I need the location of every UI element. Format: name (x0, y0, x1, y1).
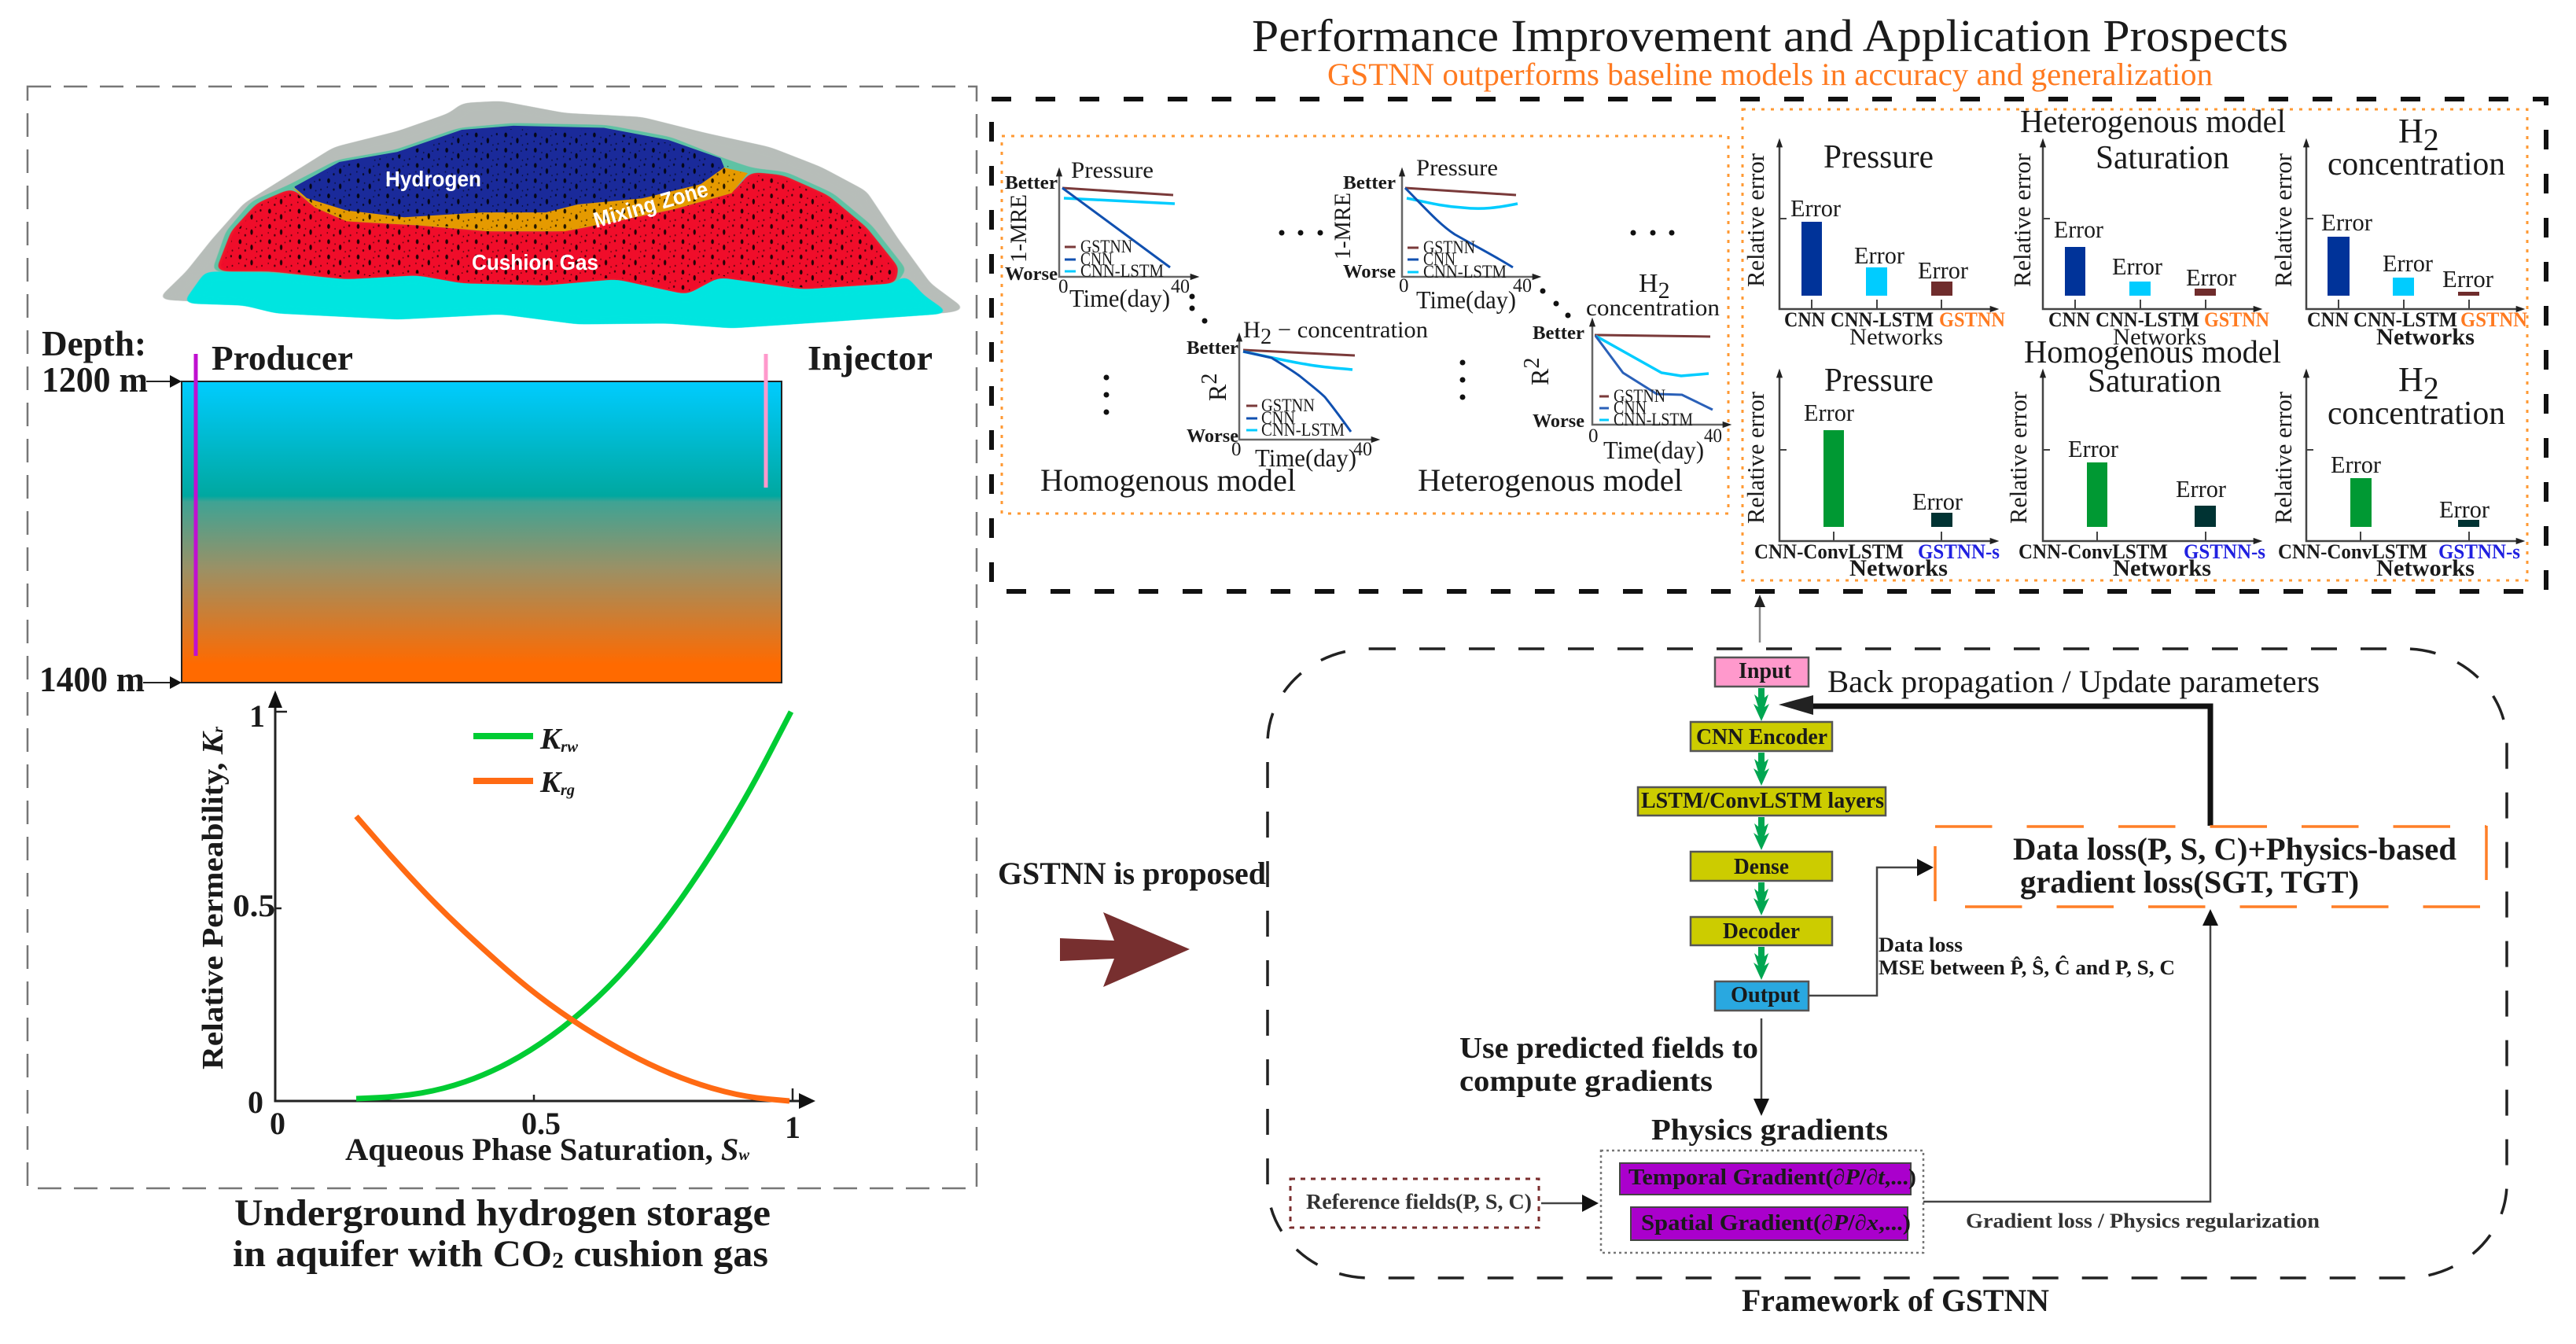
bar chart: heterogeneous H2 concentration: CNN-LSTM (2353, 308, 2457, 331)
caption: underground hydrogen storage: cushion gas (564, 1233, 768, 1275)
bar chart: heterogeneous pressure: Error (1918, 256, 1969, 284)
caption: underground hydrogen storage: Underground hydrogen storage (234, 1192, 771, 1234)
caption: underground hydrogen storage: 2 (552, 1249, 564, 1273)
panel: bar charts of relative error (1742, 103, 2527, 581)
line chart: heterogeneous H2 concentration: CNN-LSTM (1614, 410, 1693, 429)
line chart: heterogeneous H2 concentration (1520, 269, 1724, 464)
chart: relative permeability curves: Relative Permeability, Kr (197, 726, 230, 1070)
panel: GSTNN framework (1268, 649, 2507, 1278)
bar chart: homogeneous pressure: Relative error (1742, 391, 1769, 524)
line chart: heterogeneous H2 concentration: 0 (1588, 425, 1598, 447)
label: heterogenous model: Heterogenous model (1418, 462, 1683, 498)
panel: performance results (992, 99, 2546, 591)
bar chart: heterogeneous saturation (2008, 140, 2269, 350)
bar chart: heterogeneous saturation: Error (2054, 215, 2104, 243)
line chart: homogeneous pressure: 0 (1058, 276, 1068, 297)
label: compute gradients (1459, 1032, 1758, 1098)
bar chart: heterogeneous saturation: CNN (2048, 308, 2090, 331)
bar chart: homogeneous H2 concentration: CNN-ConvLSTM (2278, 540, 2427, 563)
bar chart: homogeneous pressure (1742, 363, 2000, 581)
line chart: heterogeneous pressure: GSTNN (1423, 238, 1475, 257)
line chart: homogeneous pressure: Time(day) (1069, 284, 1170, 312)
bar chart: heterogeneous H2 concentration: 2 (2423, 122, 2439, 157)
line chart: heterogeneous H2 concentration: 40 (1704, 425, 1722, 447)
chart: relative permeability curves: rw (561, 738, 579, 756)
line chart: homogeneous H2 concentration: Better (1187, 338, 1238, 359)
bar chart: homogeneous H2 concentration (2269, 360, 2520, 581)
bar chart: homogeneous H2 concentration: 2 (2423, 370, 2439, 406)
line chart: heterogeneous H2 concentration: GSTNN (1614, 386, 1665, 406)
chart: relative permeability curves: 1 (785, 1110, 800, 1145)
label: compute gradients: Use predicted fields to (1459, 1032, 1758, 1065)
line chart: heterogeneous H2 concentration: concentration (1586, 295, 1720, 321)
box: decoder (1691, 917, 1832, 945)
line chart: heterogeneous pressure (1330, 155, 1534, 314)
line chart: homogeneous pressure: 1-MRE (1006, 194, 1032, 263)
box: reference fields: Reference fields(P, S, C) (1306, 1190, 1532, 1213)
line chart: homogeneous H2 concentration: R (1203, 385, 1231, 401)
reservoir cross-section (39, 323, 933, 699)
bar chart: heterogeneous pressure: CNN-LSTM (1831, 308, 1934, 331)
chart: relative permeability curves: rg (561, 782, 575, 799)
bar chart: homogeneous H2 concentration: GSTNN-s (2438, 540, 2520, 563)
panel: underground hydrogen storage (28, 87, 977, 1188)
box: CNN encoder: CNN Encoder (1696, 725, 1827, 749)
line chart: homogeneous pressure: GSTNN (1080, 237, 1132, 256)
box: combined loss: Data loss(P, S, C)+Physics-based (2013, 831, 2456, 867)
arrow: output to physics gradients (1754, 1018, 1769, 1116)
caption: underground hydrogen storage: in aquifer with CO (233, 1233, 537, 1275)
line chart: homogeneous H2 concentration: Time(day) (1255, 444, 1356, 472)
bar chart: homogeneous saturation: Networks (2113, 555, 2211, 581)
bar chart: homogeneous pressure: Networks (1849, 555, 1948, 581)
line chart: homogeneous pressure: CNN (1080, 249, 1113, 269)
line chart: heterogeneous pressure: Time(day) (1416, 285, 1516, 314)
reservoir cross-section: Depth: (42, 323, 146, 363)
box: combined loss: gradient loss(SGT, TGT) (2020, 864, 2359, 900)
label: homogenous model: Homogenous model (1040, 462, 1296, 498)
box: reference fields (1290, 1179, 1539, 1228)
bar chart: heterogeneous pressure: Relative error (1742, 153, 1769, 287)
bar chart: homogeneous saturation: GSTNN-s (2184, 540, 2265, 563)
subtitle: GSTNN outperforms baseline models in accuracy and generalization (1327, 57, 2213, 92)
bar chart: homogeneous saturation: CNN-ConvLSTM (2018, 540, 2168, 563)
label: gradient loss: Gradient loss / Physics regularization (1966, 1210, 2320, 1232)
group: gradient boxes: Spatial Gradient(∂ P/∂x,...) (1641, 1211, 1911, 1235)
box: input (1715, 657, 1809, 687)
bar chart: heterogeneous pressure: Pressure (1823, 139, 1934, 175)
heading: homogenous model: Homogenous model (2024, 333, 2281, 370)
line chart: homogeneous H2 concentration: CNN-LSTM (1261, 420, 1345, 440)
line chart: homogeneous H2 concentration: H (1243, 317, 1260, 343)
line chart: homogeneous pressure: Pressure (1071, 157, 1154, 183)
heading: physics gradients: Physics gradients (1651, 1114, 1888, 1147)
line chart: homogeneous pressure: 40 (1171, 276, 1190, 297)
line chart: heterogeneous pressure: 0 (1399, 275, 1409, 296)
bar chart: homogeneous saturation: Saturation (2088, 363, 2221, 400)
line chart: homogeneous pressure: Worse (1005, 264, 1058, 285)
bar chart: heterogeneous H2 concentration: Error (2442, 265, 2494, 293)
chart: relative permeability curves: 0.5 (233, 888, 275, 923)
bar chart: homogeneous H2 concentration: Error (2331, 451, 2382, 478)
bar chart: heterogeneous H2 concentration: Error (2383, 249, 2434, 277)
bar chart: heterogeneous pressure: Error (1854, 241, 1905, 269)
bar chart: heterogeneous saturation: GSTNN (2204, 308, 2269, 331)
line chart: heterogeneous H2 concentration: 2 (1658, 278, 1670, 304)
bar chart: homogeneous saturation (2004, 363, 2265, 581)
bar chart: heterogeneous saturation: CNN-LSTM (2096, 308, 2199, 331)
box: dense (1691, 852, 1832, 881)
label: back propagation: Back propagation / Update parameters (1827, 664, 2320, 699)
bar chart: heterogeneous H2 concentration: GSTNN (2460, 308, 2527, 331)
caption: underground hydrogen storage (233, 1192, 771, 1275)
bar chart: heterogeneous pressure: Error (1790, 194, 1842, 222)
bar chart: homogeneous saturation: Error (2068, 435, 2119, 462)
arrow: proposal (1060, 912, 1190, 987)
line chart: homogeneous H2 concentration: 2 (1260, 325, 1271, 349)
arrow: back propagation (1779, 695, 2210, 826)
bar chart: homogeneous H2 concentration: Networks (2376, 555, 2475, 581)
reservoir mound illustration (157, 101, 966, 329)
group: gradient boxes (1601, 1151, 1923, 1253)
box: combined loss (1935, 826, 2486, 907)
bar chart: heterogeneous H2 concentration: Networks (2376, 324, 2475, 350)
bar chart: heterogeneous pressure: GSTNN (1939, 308, 2005, 331)
bar chart: homogeneous pressure: Pressure (1824, 363, 1934, 399)
chart: relative permeability curves: Aqueous Phase Saturation, Sw (345, 1132, 750, 1167)
arrow: reference to gradients (1541, 1195, 1599, 1212)
arrow: gradient loss to combined loss (1923, 909, 2218, 1202)
reservoir cross-section: 1200 m (42, 359, 148, 400)
line chart: homogeneous H2 concentration: − concentration (1271, 317, 1428, 343)
line chart: homogeneous H2 concentration: 2 (1198, 374, 1222, 385)
bar chart: heterogeneous saturation: Saturation (2096, 140, 2229, 176)
arrows: network flow (1754, 688, 1769, 980)
line chart: homogeneous H2 concentration: Worse (1187, 426, 1238, 447)
bar chart: heterogeneous pressure: CNN (1784, 308, 1825, 331)
chart: relative permeability curves: 0 (248, 1084, 263, 1120)
box: LSTM layers: LSTM/ConvLSTM layers (1641, 789, 1884, 813)
bar chart: homogeneous saturation: Error (2176, 475, 2227, 503)
line chart: heterogeneous pressure: 40 (1513, 275, 1532, 296)
bar chart: homogeneous pressure: Error (1804, 399, 1855, 426)
bar chart: homogeneous pressure: Error (1912, 488, 1963, 515)
bar chart: heterogeneous saturation: Error (2112, 252, 2163, 280)
bar chart: heterogeneous saturation: Networks (2113, 324, 2206, 350)
bar chart: homogeneous pressure: GSTNN-s (1918, 540, 2000, 563)
box: input: Input (1739, 659, 1792, 683)
label: compute gradients: compute gradients (1459, 1065, 1713, 1098)
line chart: homogeneous pressure (1005, 157, 1192, 312)
line chart: heterogeneous pressure: Pressure (1416, 155, 1498, 181)
bar chart: heterogeneous H2 concentration: CNN (2307, 308, 2349, 331)
bar chart: homogeneous H2 concentration: Error (2439, 495, 2490, 523)
caption: framework of GSTNN: Framework of GSTNN (1742, 1283, 2049, 1318)
line chart: heterogeneous pressure: CNN-LSTM (1423, 262, 1507, 282)
line chart: heterogeneous H2 concentration: H (1639, 269, 1658, 298)
line chart: homogeneous H2 concentration: CNN (1261, 408, 1295, 428)
chart: relative permeability curves (197, 690, 815, 1167)
box: dense: Dense (1734, 855, 1789, 879)
reservoir mound illustration: Hydrogen (385, 167, 481, 191)
ellipsis dots between charts (1104, 230, 1675, 415)
box: output: Output (1731, 983, 1801, 1007)
group: gradient boxes: Temporal Gradient(∂ P/∂t,...) (1628, 1165, 1916, 1190)
bar chart: homogeneous H2 concentration: concentration (2328, 396, 2505, 432)
bar chart: heterogeneous pressure (1742, 139, 2005, 350)
label: GSTNN is proposed: GSTNN is proposed (998, 856, 1266, 891)
reservoir cross-section: Injector (808, 339, 933, 377)
bar chart: heterogeneous H2 concentration: Relative error (2269, 153, 2297, 287)
reservoir cross-section: Producer (212, 339, 353, 377)
arrow: output to data loss (1809, 859, 1934, 996)
line chart: heterogeneous pressure: Better (1343, 173, 1396, 193)
bar chart: homogeneous pressure: CNN-ConvLSTM (1754, 540, 1904, 563)
bar chart: heterogeneous saturation: Relative error (2008, 153, 2036, 287)
reservoir mound illustration: Mixing Zone (591, 177, 711, 233)
bar chart: heterogeneous H2 concentration: Error (2321, 208, 2373, 236)
line chart: homogeneous H2 concentration: 40 (1353, 439, 1372, 460)
label: data loss: MSE between P̂, Ŝ, Ĉ and P, S, C (1879, 956, 2175, 979)
chart: relative permeability curves: K (540, 723, 560, 756)
arrow: framework to results (1754, 595, 1765, 643)
reservoir cross-section: 1400 m (39, 659, 145, 699)
line chart: heterogeneous H2 concentration: Better (1533, 323, 1584, 344)
line chart: heterogeneous pressure: 1-MRE (1330, 193, 1356, 260)
chart: relative permeability curves: 1 (249, 698, 265, 734)
line chart: homogeneous H2 concentration: GSTNN (1261, 396, 1315, 415)
label: data loss: Data loss (1879, 933, 1963, 956)
reservoir mound illustration: Cushion Gas (472, 250, 598, 274)
chart: relative permeability curves: 0 (270, 1106, 285, 1141)
line chart: heterogeneous pressure: Worse (1343, 262, 1396, 282)
chart: relative permeability curves: K (540, 766, 560, 799)
bar chart: homogeneous H2 concentration: H (2398, 360, 2423, 399)
line chart: heterogeneous H2 concentration: Worse (1533, 411, 1584, 432)
line chart: heterogeneous H2 concentration: Time(day) (1603, 436, 1704, 464)
bar chart: heterogeneous H2 concentration: concentration (2328, 146, 2505, 182)
line chart: heterogeneous H2 concentration: CNN (1614, 398, 1647, 418)
line chart: heterogeneous H2 concentration: 2 (1520, 358, 1544, 369)
bar chart: homogeneous saturation: Relative error (2004, 391, 2032, 524)
box: output (1715, 981, 1809, 1011)
line chart: heterogeneous pressure: CNN (1423, 249, 1455, 269)
chart: relative permeability curves: 0.5 (521, 1106, 561, 1141)
bar chart: heterogeneous H2 concentration: H (2398, 112, 2423, 150)
line chart: homogeneous H2 concentration (1187, 317, 1428, 472)
heading: heterogenous model: Heterogenous model (2020, 103, 2286, 139)
bar chart: homogeneous H2 concentration: Relative error (2269, 391, 2297, 524)
bar chart: heterogeneous pressure: Networks (1849, 324, 1943, 350)
line chart: heterogeneous H2 concentration: R (1525, 369, 1554, 385)
bar chart: heterogeneous H2 concentration (2269, 112, 2527, 350)
panel: line charts of accuracy over time (1002, 136, 1728, 514)
line chart: homogeneous H2 concentration: 0 (1231, 439, 1241, 460)
label: data loss (1879, 933, 2175, 979)
box: decoder: Decoder (1723, 919, 1800, 944)
line chart: homogeneous pressure: CNN-LSTM (1080, 261, 1164, 281)
title: Performance Improvement and Application Prospects (1252, 10, 2288, 61)
bar chart: heterogeneous saturation: Error (2186, 263, 2237, 291)
line chart: homogeneous pressure: Better (1005, 173, 1058, 193)
